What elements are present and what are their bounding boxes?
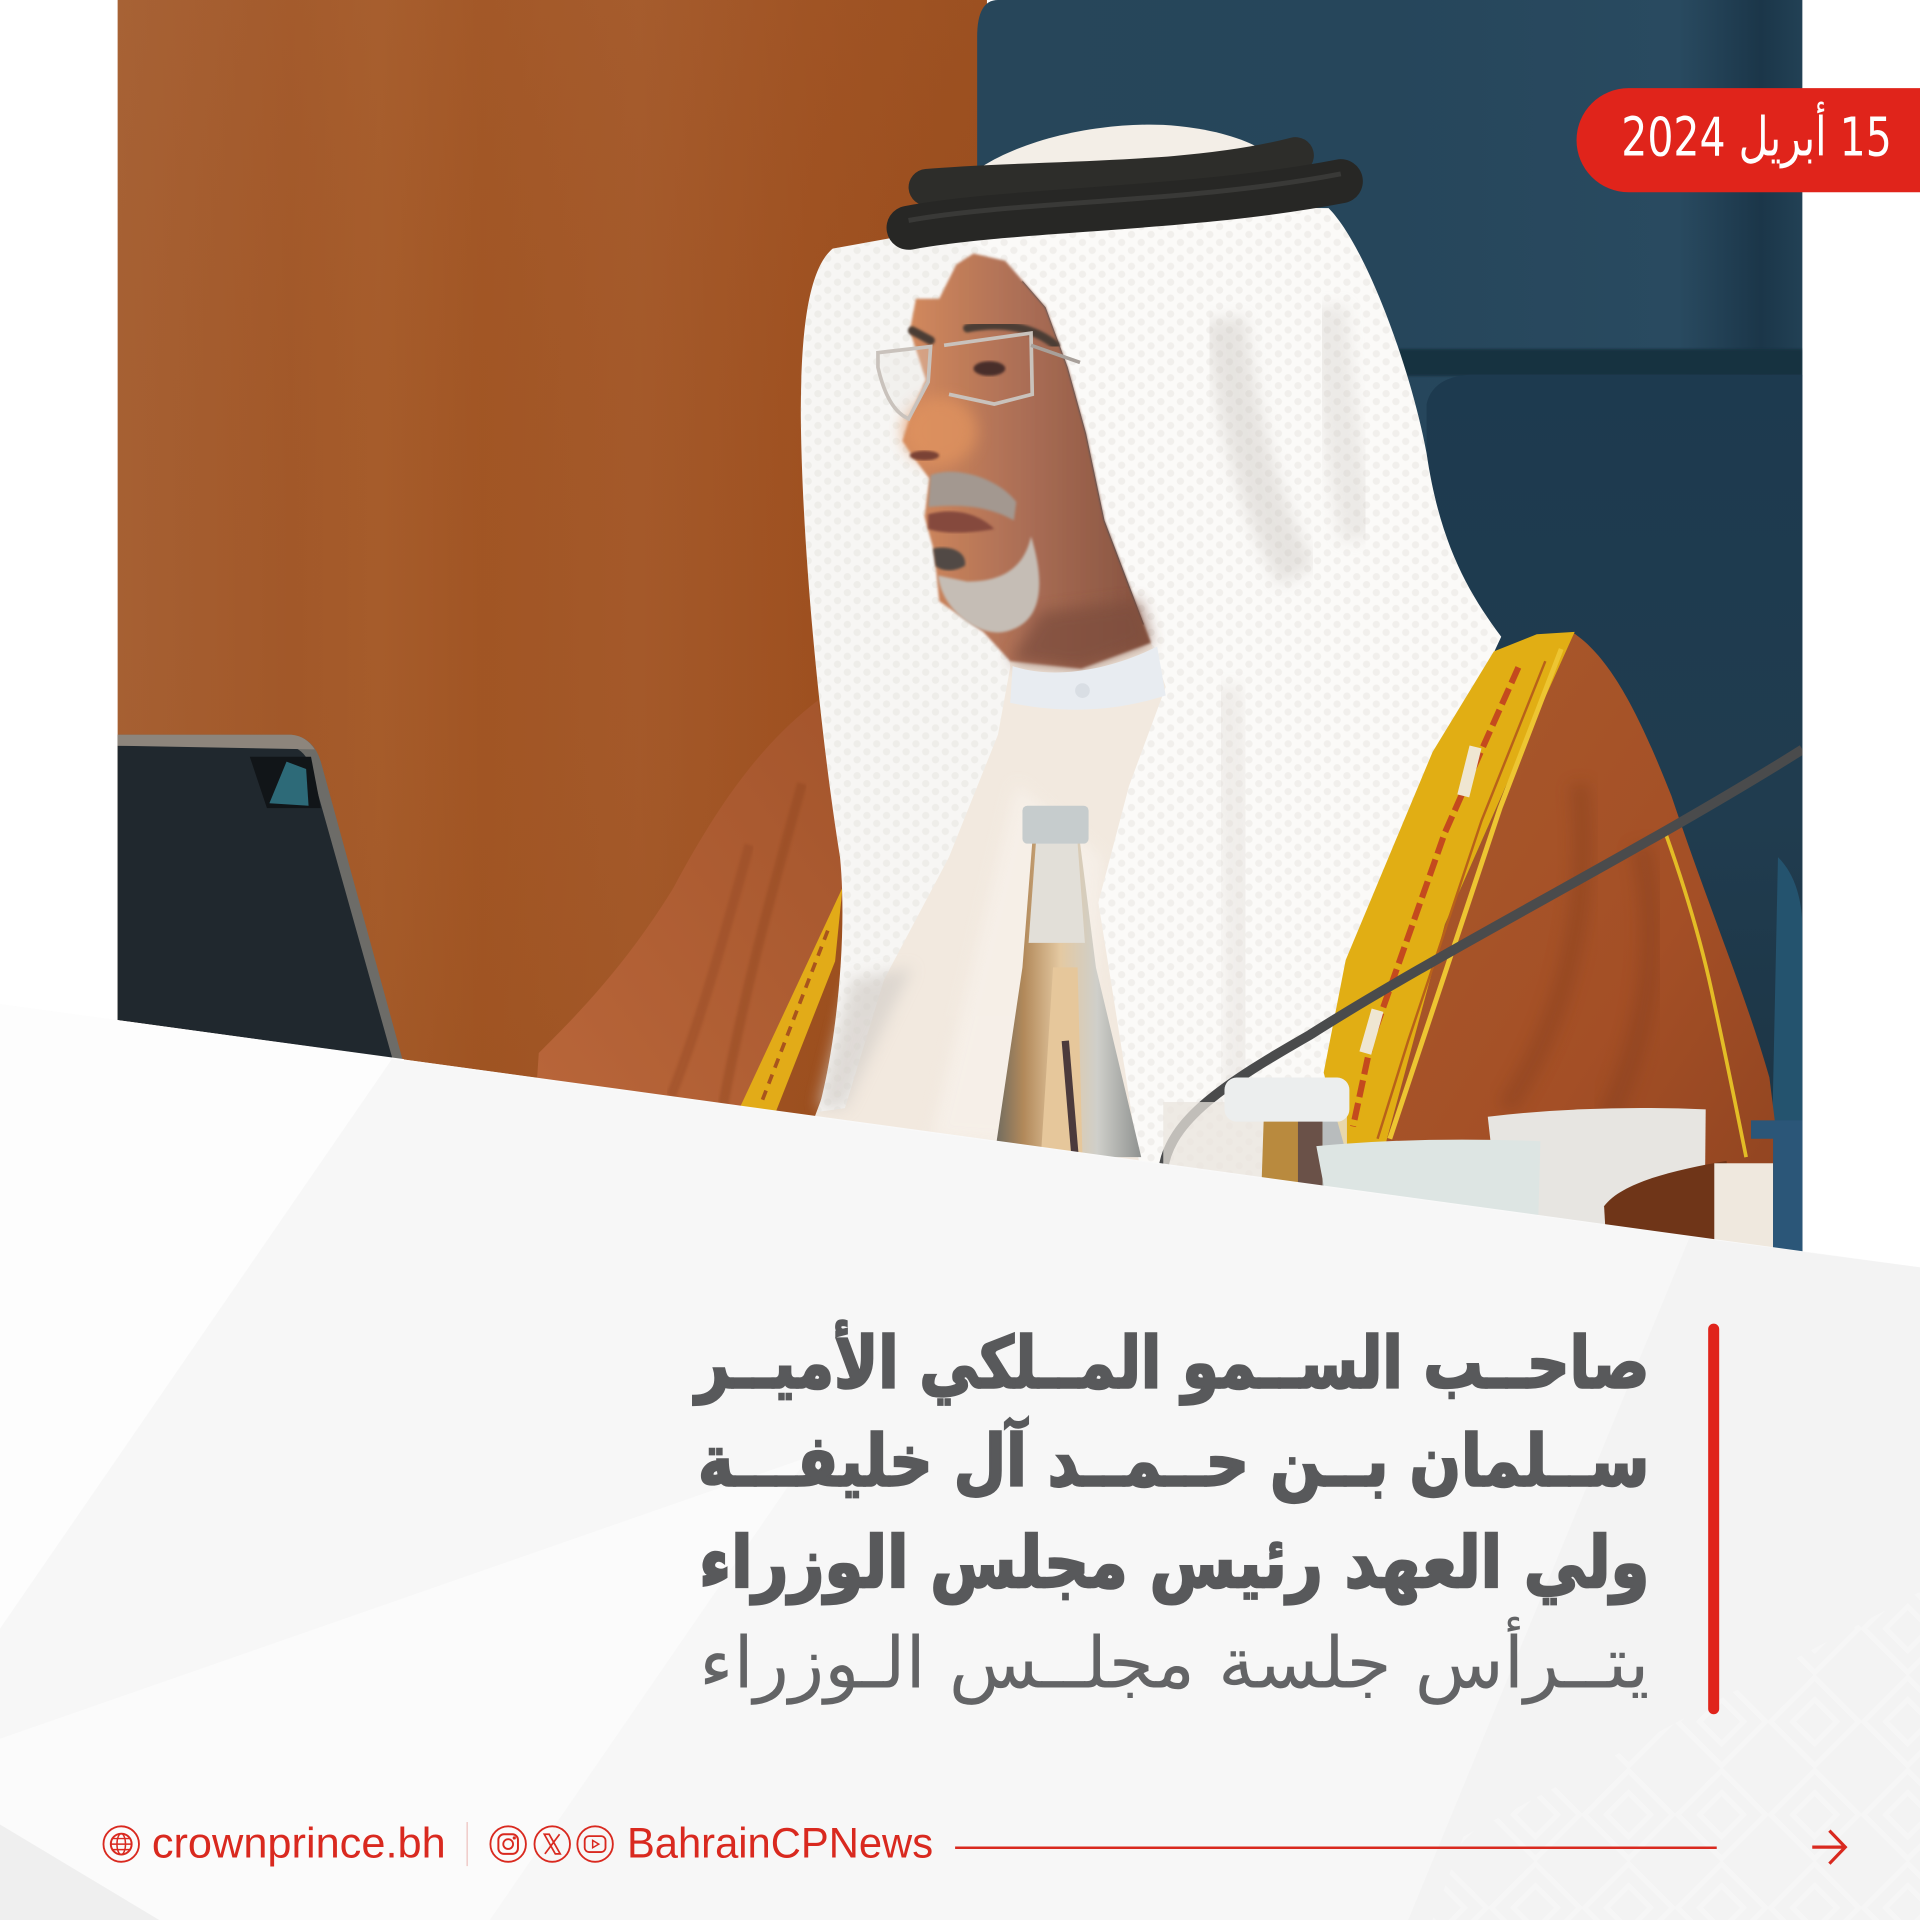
footer separator [466, 1822, 468, 1866]
social handle text: BahrainCPNews [627, 1820, 933, 1868]
photo: glasses [878, 333, 1080, 419]
photo: gold trim of robe [1324, 632, 1575, 1151]
headline line 2: ســلمان بــن حــمــد آل خليفـــة [698, 1417, 1649, 1502]
headline line 1: صاحــب الســمو المــلكي الأميــر [693, 1320, 1649, 1405]
icon: instagram [490, 1826, 526, 1862]
photo: beard [938, 536, 1039, 632]
headline line 4: يتــرأس جلسة مجلــس الـوزراء [699, 1615, 1649, 1705]
photo: headdress left panel [801, 227, 1022, 1112]
photo: collar [1010, 647, 1166, 710]
photo: thin yellow edge on robe [1665, 833, 1746, 1157]
photo: wood wall [118, 0, 987, 1116]
photo: microphone wire [1163, 749, 1802, 1169]
photo: crown prince at cabinet session [118, 0, 1802, 1261]
headline text block [693, 1320, 1649, 1705]
photo: eyebrow and eye [912, 325, 1056, 345]
photo: left robe sleeve [536, 700, 845, 1120]
photo: white undergarment [815, 624, 1166, 1160]
photo: right robe shoulder [1386, 634, 1775, 1192]
photo: headdress right panel [1022, 208, 1502, 1177]
footer [103, 1820, 1845, 1868]
lower white panel with geometric background [0, 1004, 1920, 1920]
date badge [1577, 88, 1920, 192]
photo: water bottle [994, 806, 1141, 1157]
photo: cups and items on table [1316, 1108, 1802, 1261]
photo: headdress top crown [984, 124, 1255, 166]
website text: crownprince.bh [152, 1820, 446, 1868]
photo: tablet [118, 735, 404, 1065]
headline line 3: ولي العهد رئيس مجلس الوزراء [699, 1521, 1649, 1605]
photo: face [878, 253, 1151, 669]
date text: 15 أبريل 2024 [1621, 102, 1892, 169]
icon: X [534, 1826, 570, 1862]
photo: agal head ring [909, 156, 1341, 228]
icon: globe [103, 1826, 139, 1862]
icon: arrow [1812, 1831, 1845, 1864]
photo: leather chair [977, 0, 1802, 1261]
footer rule [955, 1847, 1717, 1849]
icon: youtube [577, 1826, 613, 1862]
photo: glass with lid [1163, 1078, 1350, 1186]
red vertical accent bar [1708, 1324, 1719, 1714]
